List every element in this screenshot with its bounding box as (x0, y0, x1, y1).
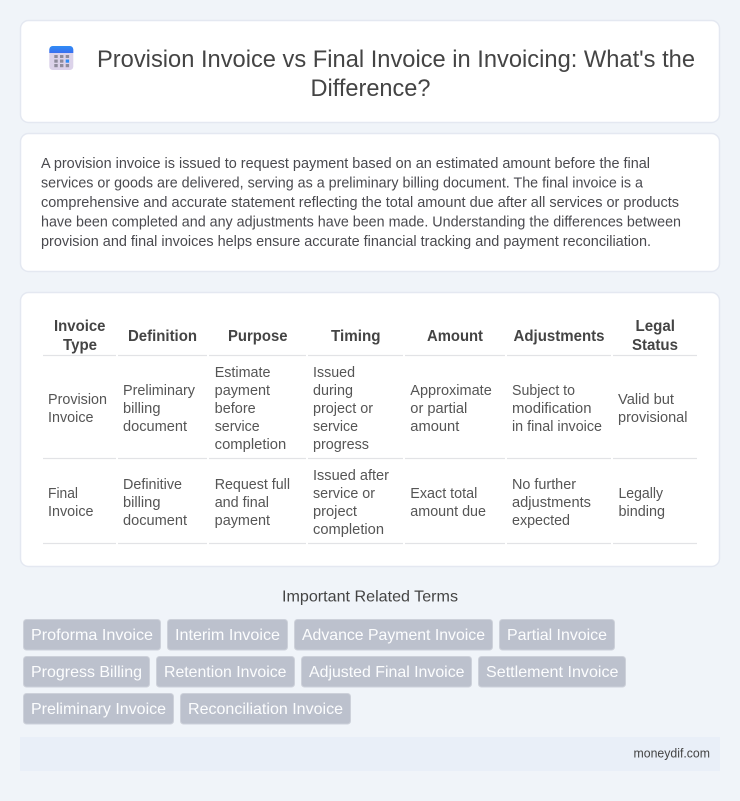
tag: Preliminary Invoice: Preliminary Invoice (31, 701, 166, 718)
table row: final invoice: adjustments (512, 495, 591, 511)
table row: provision invoice: in final invoice (512, 419, 602, 435)
table row: provision invoice: project or (313, 401, 373, 417)
tag: Partial Invoice (500, 620, 614, 650)
table row: final invoice: Definitive (123, 477, 182, 493)
table row: provision invoice: completion (215, 437, 286, 453)
table header: Invoice (54, 318, 106, 335)
tag: Settlement Invoice (478, 656, 626, 687)
description text: services or goods are delivered, serving as a preliminary billing document. The final invoice is a (41, 176, 643, 192)
table row: final invoice: binding (618, 504, 665, 520)
table row: final invoice: Invoice (48, 504, 94, 520)
tag: Adjusted Final Invoice (302, 656, 472, 687)
tag: Reconciliation Invoice: Reconciliation Invoice (188, 701, 343, 718)
table header: Timing (331, 328, 380, 345)
table row: final invoice: Request full (215, 477, 290, 493)
table row: final invoice: and final (215, 495, 269, 511)
table row: provision invoice: before (215, 401, 256, 417)
table row: final invoice: No further (512, 477, 576, 493)
table row: final invoice: expected (512, 513, 570, 529)
table row: provision invoice: billing (123, 401, 160, 417)
tag: Progress Billing: Progress Billing (31, 664, 142, 681)
table row: provision invoice: payment (215, 383, 270, 399)
table row: final invoice: Final (48, 486, 78, 502)
panel: description (20, 134, 720, 272)
table row: provision invoice: document (123, 419, 187, 435)
tag: Reconciliation Invoice (180, 694, 350, 724)
table row: provision invoice: or partial (410, 401, 467, 417)
table header: Adjustments (514, 328, 605, 345)
table header: Definition (128, 328, 197, 345)
tag: Proforma Invoice (24, 620, 160, 650)
related term tags (24, 620, 626, 724)
table header (54, 318, 678, 354)
panel: title card (20, 20, 720, 122)
footer source text: moneydif.com (634, 746, 710, 760)
title (97, 46, 695, 102)
tag: Advance Payment Invoice (294, 620, 492, 650)
table row: final invoice: completion (313, 522, 384, 538)
description text: have been completed and any adjustments have been made. Understanding the differences between (41, 214, 681, 230)
table row: provision invoice: Issued (313, 365, 355, 381)
table row: provision invoice: Approximate (410, 383, 492, 399)
title: Provision Invoice vs Final Invoice in Invoicing: What's the (97, 46, 695, 73)
table row: final invoice (48, 468, 665, 538)
table row: provision invoice: amount (410, 419, 459, 435)
description text: A provision invoice is issued to request payment based on an estimated amount before the final (41, 156, 650, 172)
table row: final invoice: service or (313, 486, 375, 502)
table row: provision invoice: Valid but (618, 392, 674, 408)
table row: final invoice: billing (123, 495, 160, 511)
heading: related terms: Important Related Terms (282, 588, 458, 606)
table header: Type (63, 337, 97, 354)
tag: Advance Payment Invoice: Advance Payment Invoice (302, 627, 485, 644)
icon: calendar (49, 46, 73, 70)
table row: provision invoice: Preliminary (123, 383, 196, 399)
footer bar (20, 737, 720, 771)
table row: provision invoice: Estimate (215, 365, 270, 381)
title: Difference? (310, 75, 430, 102)
table header: Status (632, 337, 678, 354)
description text (41, 156, 681, 250)
table row: final invoice: project (313, 504, 357, 520)
tag: Progress Billing (24, 656, 150, 687)
table row: provision invoice: service (215, 419, 260, 435)
tag: Partial Invoice: Partial Invoice (507, 627, 607, 644)
tag: Interim Invoice (168, 620, 288, 650)
table row: provision invoice: Invoice (48, 410, 94, 426)
tag: Retention Invoice (156, 656, 294, 687)
table row: final invoice: amount due (410, 504, 486, 520)
table row: provision invoice (48, 365, 688, 453)
panel: comparison table (20, 292, 720, 566)
tag: Interim Invoice: Interim Invoice (175, 627, 280, 644)
table row: provision invoice: progress (313, 437, 369, 453)
table header: Amount (427, 328, 484, 345)
table row: provision invoice: during (313, 383, 353, 399)
table row: provision invoice: service (313, 419, 358, 435)
table row: final invoice: payment (215, 513, 270, 529)
table row: final invoice: document (123, 513, 187, 529)
description text: comprehensive and accurate statement reflecting the total amount due after all services or products (41, 195, 679, 211)
tag: Adjusted Final Invoice: Adjusted Final Invoice (309, 664, 465, 681)
tag: Retention Invoice: Retention Invoice (164, 664, 287, 681)
table header: Purpose (228, 328, 288, 345)
table row: provision invoice: Provision (48, 392, 107, 408)
tag: Proforma Invoice: Proforma Invoice (31, 627, 153, 644)
table row: provision invoice: Subject to (512, 383, 575, 399)
table row: final invoice: Issued after (313, 468, 389, 484)
tag: Settlement Invoice: Settlement Invoice (486, 664, 619, 681)
table row: final invoice: Legally (618, 486, 664, 502)
table row: final invoice: Exact total (410, 486, 477, 502)
description text: provision and final invoices helps ensure accurate financial tracking and payment reconciliation. (41, 234, 651, 250)
tag: Preliminary Invoice (24, 694, 174, 724)
table header: Legal (636, 318, 675, 335)
table row: provision invoice: provisional (618, 410, 688, 426)
table row: provision invoice: modification (512, 401, 592, 417)
